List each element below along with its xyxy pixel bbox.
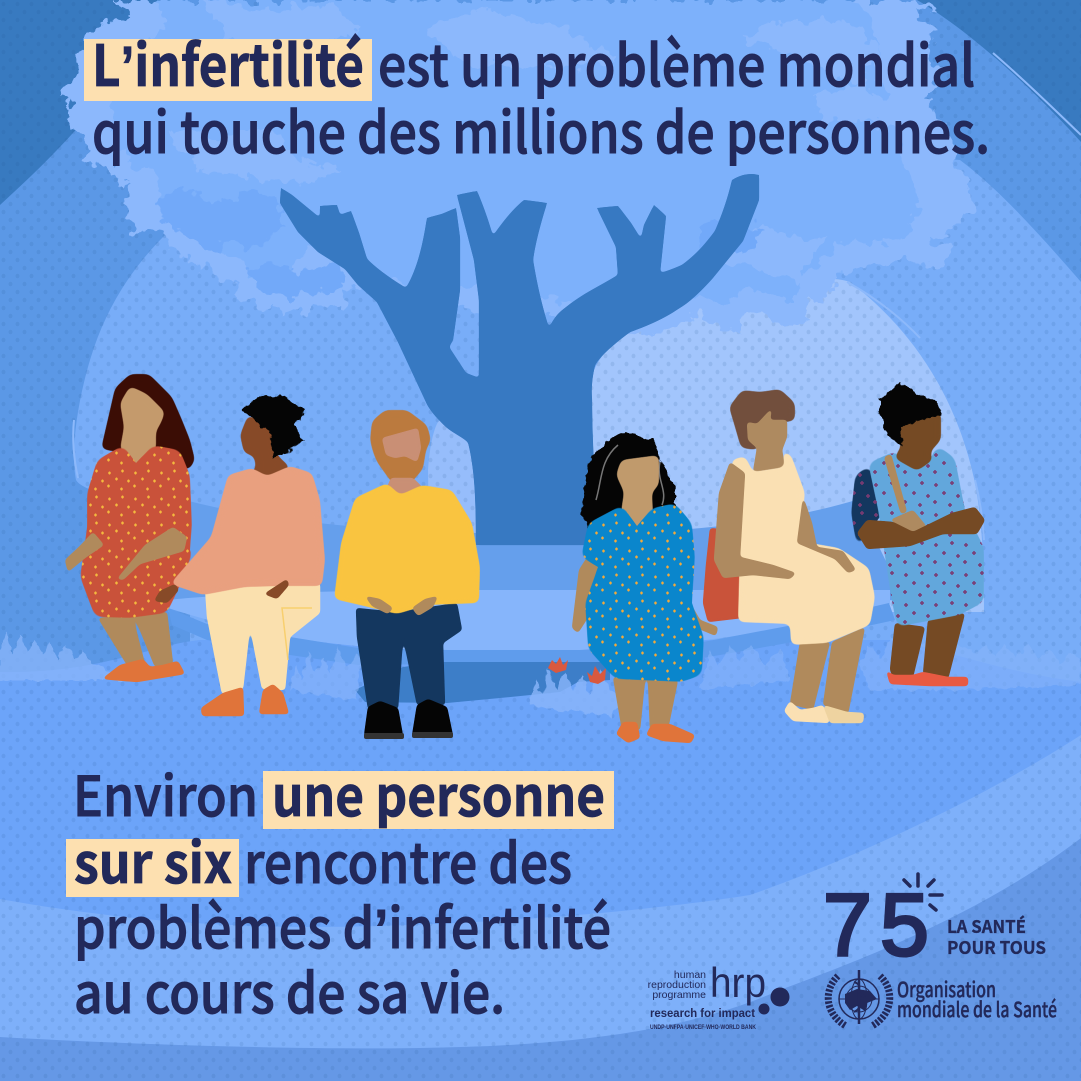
person 4: woman in blue dress xyxy=(572,432,718,743)
slogan: LA SANTÉ xyxy=(947,914,1026,939)
statement text: une personne xyxy=(272,752,605,832)
shoes xyxy=(201,687,244,716)
sweater xyxy=(334,483,480,614)
hair xyxy=(101,374,195,470)
person 2: woman in peach top xyxy=(154,396,325,716)
hair xyxy=(242,396,306,458)
logo: 75 years xyxy=(823,874,1046,974)
face and neck xyxy=(240,415,291,481)
background: ground band xyxy=(0,640,1081,910)
face and neck xyxy=(616,455,659,529)
shoes xyxy=(784,701,830,723)
legs xyxy=(613,677,678,730)
hands xyxy=(365,596,393,614)
face xyxy=(382,428,421,462)
hands xyxy=(154,584,179,603)
background: dark top corners xyxy=(0,0,1081,300)
grass: centre left xyxy=(290,648,362,700)
partners: UNDP·UNFPA·UNICEF·WHO·WORLD BANK xyxy=(650,1025,757,1031)
staff and serpent xyxy=(858,970,860,1024)
logo: HRP xyxy=(648,959,790,1031)
title: est un problème mondial xyxy=(378,21,975,103)
hrp letters: hrp xyxy=(710,959,766,1006)
numerals: 75 xyxy=(823,875,929,974)
hair xyxy=(729,389,795,450)
boots xyxy=(364,701,403,736)
background: light arch xyxy=(74,150,1081,690)
shoes xyxy=(616,722,640,743)
laurels xyxy=(828,976,846,1026)
statement text: rencontre des xyxy=(244,819,572,899)
canopy deeper lobes xyxy=(158,190,765,298)
statement text: au cours de sa vie. xyxy=(74,949,505,1029)
logo: WHO wordmark: Organisation xyxy=(897,973,996,1003)
neck xyxy=(386,478,423,498)
slogan: POUR TOUS xyxy=(947,935,1046,960)
flowers xyxy=(548,657,606,684)
sleeves xyxy=(851,465,885,549)
tagline: research for impact xyxy=(650,1008,755,1020)
logo: WHO wordmark xyxy=(897,973,1057,1023)
legs xyxy=(890,623,925,677)
shoes xyxy=(102,659,185,682)
hair xyxy=(879,382,941,446)
person 1: woman in red dress xyxy=(65,374,195,682)
person 5: woman in cream dress with red bag xyxy=(703,389,875,723)
neck and face xyxy=(894,411,941,471)
programme name: programme xyxy=(652,989,706,1001)
background: dark bottom band xyxy=(0,838,1081,1081)
bench seat xyxy=(168,590,890,651)
statement text: sur six xyxy=(74,819,232,899)
dress xyxy=(581,503,704,682)
grass: right xyxy=(700,640,1081,690)
highlight: top xyxy=(84,39,372,101)
jeans xyxy=(356,603,462,709)
title: L’infertilité xyxy=(92,21,364,103)
continents xyxy=(845,989,877,1011)
background: pale patch left of trunk xyxy=(428,418,482,612)
canopy inner xyxy=(105,0,920,312)
legs xyxy=(98,612,173,667)
legs xyxy=(790,642,830,710)
tree canopy xyxy=(62,0,975,335)
canopy pale patches xyxy=(170,0,905,310)
face and neck xyxy=(747,408,787,472)
red bag xyxy=(703,528,750,622)
shadow under bench xyxy=(355,662,610,703)
highlight: sur six xyxy=(66,839,239,897)
programme name: reproduction xyxy=(648,979,706,991)
dress xyxy=(731,450,875,645)
background: medium arch xyxy=(0,0,1081,690)
hair highlights xyxy=(596,445,664,505)
programme name: human xyxy=(674,969,706,981)
arms xyxy=(857,507,985,549)
near arm xyxy=(714,462,796,579)
programme name xyxy=(648,969,706,1001)
dress xyxy=(868,445,984,627)
dots xyxy=(770,988,790,1006)
canopy outer rim xyxy=(62,0,975,335)
bench front edge xyxy=(168,603,895,665)
statement text: Environ xyxy=(73,752,258,832)
highlight: une personne xyxy=(263,771,614,829)
bench back xyxy=(168,500,905,612)
background: pale dome right of trunk xyxy=(586,279,984,612)
person 3: man in yellow sweater xyxy=(334,410,480,739)
hair xyxy=(581,432,675,532)
arms xyxy=(117,527,187,580)
face and neck xyxy=(120,386,165,466)
shoes xyxy=(886,670,968,686)
hair and beard xyxy=(370,410,431,483)
title xyxy=(92,21,990,170)
statement text xyxy=(73,752,611,1029)
top xyxy=(170,466,325,595)
person 6: woman in light blue dress xyxy=(851,382,985,686)
far arm xyxy=(790,457,856,573)
grass: centre xyxy=(530,668,622,716)
dress xyxy=(80,445,192,618)
left arm xyxy=(572,556,600,633)
tree trunk and branches xyxy=(280,174,759,545)
statement text: problèmes d’infertilité xyxy=(74,884,611,964)
grass: left xyxy=(0,632,130,680)
sun rays xyxy=(904,874,942,910)
slogan xyxy=(947,914,1046,960)
trouser seam xyxy=(282,608,312,660)
logo: WHO emblem xyxy=(828,970,890,1026)
light streaks on arches xyxy=(73,53,1081,540)
background: light curved band xyxy=(0,735,1081,1081)
bench xyxy=(168,500,905,665)
right arm xyxy=(683,590,718,636)
globe xyxy=(839,979,879,1019)
bag strap xyxy=(884,454,907,514)
folded bag xyxy=(890,510,927,532)
trousers xyxy=(205,583,320,694)
